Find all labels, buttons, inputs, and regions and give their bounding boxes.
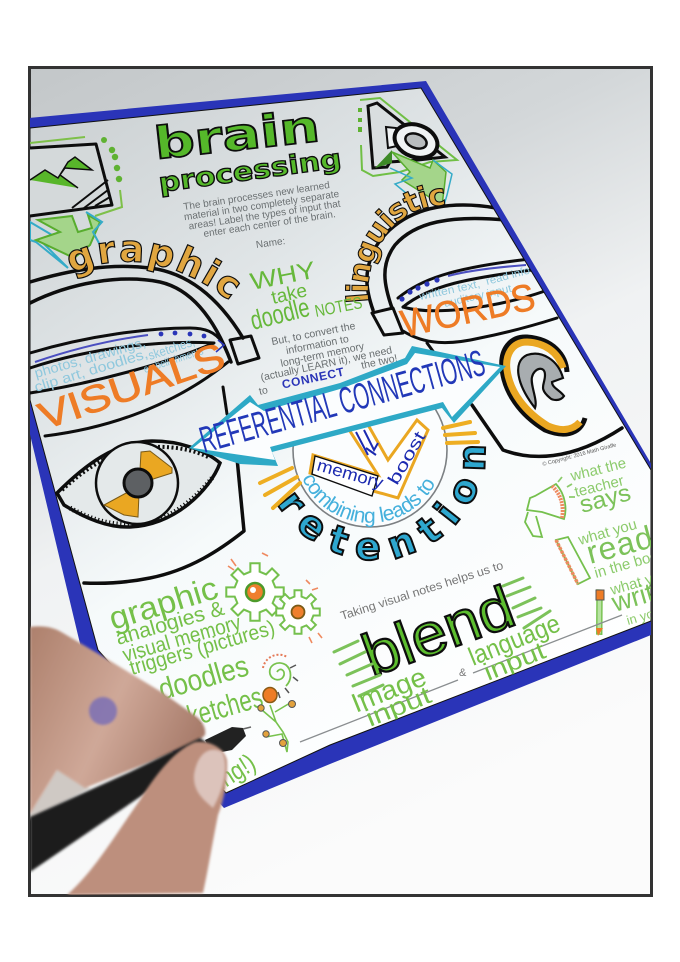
- head band arcs: [367, 205, 506, 335]
- green note text: graphic analogies: [105, 570, 278, 795]
- green note text right: teacher says: teacher: [573, 472, 626, 501]
- visuals band: VISUALS: [33, 336, 230, 439]
- handwritten answer: language input: input: [480, 637, 550, 687]
- check mark: memory: [315, 456, 386, 493]
- icon: letter Aa: [360, 98, 457, 176]
- green note text right: teacher says: says: [577, 479, 634, 519]
- green note text right: read: in the book: [592, 545, 668, 582]
- language input notes: read info: [485, 265, 531, 288]
- green note text: graphic analogies: triggers (pictures): [127, 616, 278, 680]
- doodle notes question: take: [269, 280, 309, 309]
- intro paragraph: [183, 180, 342, 240]
- double arrow: referential connections: [189, 342, 506, 466]
- explanation paragraph: to: [258, 384, 269, 398]
- visual input notes: [35, 340, 204, 392]
- doodle notes question: WHY: [248, 257, 318, 296]
- name field: Name:: [255, 236, 286, 251]
- circle: combining leads to retention: combining leads to: [304, 475, 434, 528]
- check mark: boost: [384, 428, 430, 488]
- green note text: graphic analogies: ing!): [209, 747, 261, 795]
- icon: ear: [502, 337, 585, 434]
- ampersand: &: [459, 667, 467, 679]
- language input notes: [418, 267, 530, 307]
- green note text: graphic analogies: visual memory: [120, 611, 244, 667]
- icon: gears: [226, 553, 322, 643]
- circle: combining leads to retention: [292, 410, 448, 528]
- yellow accent dashes: [260, 422, 478, 508]
- doodle notes question: [249, 261, 362, 330]
- explanation paragraph: (actually LEARN it), we need: [259, 344, 393, 384]
- intro paragraph: areas! Label the types of input that: [188, 199, 342, 232]
- explanation paragraph: information to: [285, 333, 350, 357]
- title: brain processing: processing: [157, 144, 343, 199]
- index finger: [30, 626, 205, 814]
- visual input notes: sketches,: [146, 334, 197, 363]
- language input notes: written text,: [417, 278, 481, 303]
- worksheet paper with blue border: [17, 81, 656, 808]
- green note text: graphic analogies: analogies &: [113, 597, 227, 650]
- green note text right: write: what you: [607, 566, 671, 599]
- visual input notes: photos, drawings,: [32, 334, 147, 381]
- icon: megaphone: [525, 477, 575, 537]
- explanation paragraph: But, to convert the: [270, 320, 357, 348]
- thumb: [67, 742, 227, 895]
- explanation paragraph: the two!: [360, 352, 399, 372]
- green note text: graphic analogies: sketches: [173, 681, 267, 737]
- icon: eye: [57, 441, 220, 527]
- lens shape: [30, 328, 224, 393]
- writing lines: [300, 615, 622, 742]
- background shadow under the hand: [30, 768, 90, 820]
- arrow: green lightning right: [390, 152, 452, 205]
- icon: book: [556, 537, 590, 584]
- handwritten answer: language input: language: [464, 608, 564, 672]
- intro paragraph: enter each center of the brain.: [203, 209, 336, 240]
- label: linguistic: linguistic: [344, 184, 446, 302]
- title: brain processing: brain: [152, 101, 322, 170]
- green note text right: teacher says: what the: [568, 455, 628, 485]
- ink smudge: [89, 697, 117, 725]
- green note text right: teacher says: [570, 460, 630, 512]
- handwritten answer: image input: input: [362, 681, 435, 733]
- words band: WORDS: [397, 276, 539, 346]
- handwritten answer: image input: Image: [347, 662, 431, 719]
- doodle notes question: NOTES: [313, 293, 364, 321]
- icon: spiral doodle: [263, 655, 298, 698]
- green note text: graphic analogies: doodles: [155, 650, 252, 707]
- copyright note: © Copyright: 2016 Math Giraffe: [542, 441, 617, 468]
- word: blend: blend: [354, 573, 523, 689]
- icon: pencil: [595, 590, 604, 636]
- thumbnail: [194, 750, 225, 808]
- photo frame and background: [30, 68, 652, 896]
- visual input notes: clip art, doodles,: [32, 345, 150, 395]
- green stripes beside blend: [334, 578, 550, 696]
- lens shape: [398, 259, 545, 311]
- visual input notes: embellishments: [142, 345, 205, 376]
- icon: picture frame with mountains: [30, 137, 122, 216]
- words band: [397, 276, 622, 456]
- left head: visual centre: [30, 266, 259, 583]
- explanation paragraph: long-term memory: [279, 340, 366, 370]
- visuals band: [33, 336, 244, 583]
- intro paragraph: The brain processes new learned: [183, 180, 331, 213]
- hand holding pen: [30, 626, 251, 895]
- language input notes: auditory input,: [443, 282, 516, 310]
- title: brain processing: [156, 112, 340, 198]
- green note text right: read: read: [582, 518, 658, 571]
- explanation paragraph: CONNECT: [281, 365, 346, 392]
- explanation paragraph: [258, 320, 399, 398]
- intro paragraph: material in two completely separate: [183, 189, 340, 223]
- arrow: green lightning left: [30, 212, 102, 268]
- blanks sentence: Taking visual notes helps us to: [339, 558, 505, 623]
- green note text right: read: what you: [575, 516, 639, 549]
- right head: language centre: [367, 205, 622, 456]
- green note text right: write: in your: [625, 603, 667, 628]
- label: graphic: graphic: [68, 240, 240, 300]
- doodle notes question: doodle: [247, 292, 313, 336]
- green note text right: write: write: [607, 573, 671, 618]
- green note text right: write: [610, 576, 651, 625]
- green note text: graphic analogies: graphic: [105, 570, 222, 637]
- pen: [30, 727, 251, 872]
- icon: flower connections doodle: [258, 688, 296, 752]
- label: retention: retention: [278, 446, 486, 562]
- head band arcs: [30, 266, 259, 364]
- check mark: [310, 420, 430, 498]
